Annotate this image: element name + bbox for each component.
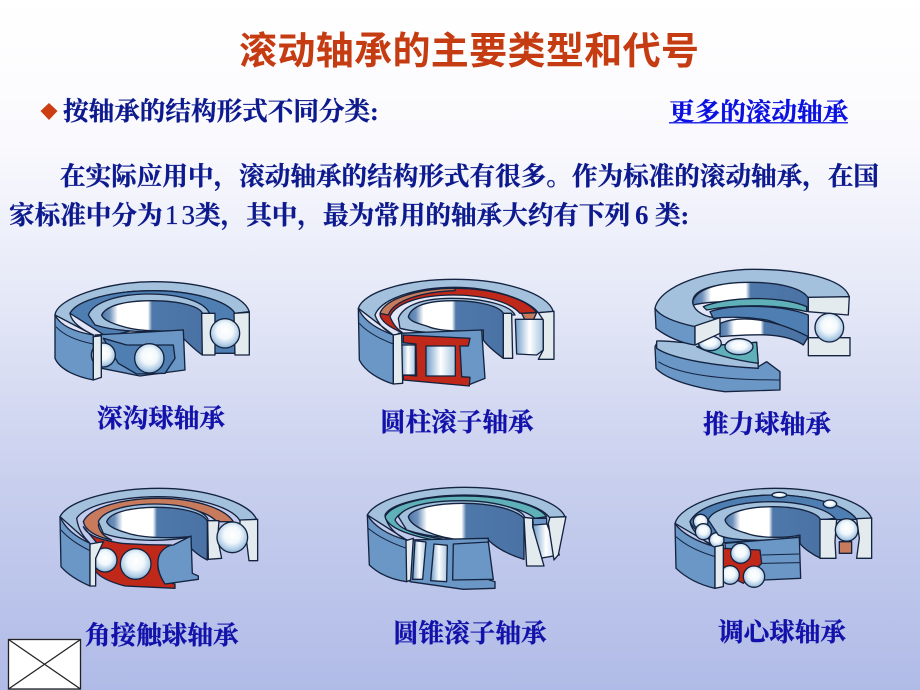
bearing: thrust ball — [655, 269, 850, 392]
paragraph: 家标准中分为 — [9, 200, 163, 230]
bullet: diamond — [40, 103, 58, 120]
bearing: tapered roller — [367, 487, 566, 589]
paragraph — [9, 161, 879, 231]
title: 滚动轴承的主要类型和代号 — [239, 31, 699, 73]
paragraph: 在实际应用中，滚动轴承的结构形式有很多。作为标准的滚动轴承，在国 — [60, 161, 879, 192]
label: 圆锥滚子轴承 — [393, 619, 547, 648]
paragraph: 13 — [165, 200, 195, 230]
paragraph: 6 — [635, 200, 648, 230]
link: more bearings: 更多的滚动轴承 — [669, 97, 849, 127]
label: 圆柱滚子轴承 — [380, 408, 534, 437]
navigation placeholder: crossed box — [8, 640, 80, 689]
label: 角接触球轴承 — [85, 621, 239, 650]
bearing: deep groove ball — [55, 282, 249, 380]
bearing: cylindrical roller — [358, 279, 554, 386]
label: 调心球轴承 — [718, 618, 846, 647]
bearing: angular contact ball — [60, 488, 258, 588]
label: 推力球轴承 — [703, 410, 831, 439]
bearing: self-aligning ball — [675, 488, 872, 588]
label: 深沟球轴承 — [97, 404, 225, 433]
paragraph: 类: — [655, 201, 689, 230]
subheading: 按轴承的结构形式不同分类: — [63, 97, 379, 126]
paragraph: 类，其中，最为常用的轴承大约有下列 — [195, 201, 630, 231]
